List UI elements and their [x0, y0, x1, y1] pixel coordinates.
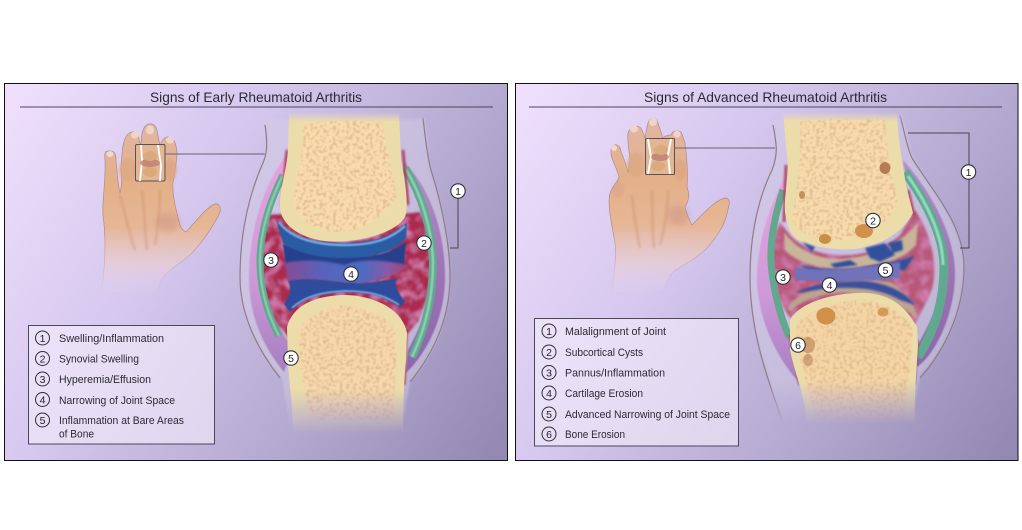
leader line from hand to joint — [674, 147, 775, 149]
cartilage blue upper — [276, 218, 407, 269]
cartilage blue lower — [284, 278, 405, 312]
red joint space — [261, 212, 431, 345]
marker 2: 2 — [421, 238, 427, 250]
marker 5: 5 — [883, 265, 889, 277]
legend: early: Swelling/Inflammation — [59, 333, 164, 345]
title: early: Signs of Early Rheumatoid Arthritis — [150, 89, 362, 105]
cartilage middle lens — [284, 261, 412, 283]
marker 2 — [417, 236, 431, 250]
legend: early — [28, 326, 214, 444]
joint illustration: advanced — [750, 112, 964, 424]
label bracket 1 — [908, 133, 969, 248]
legend: early: 3 — [40, 374, 46, 386]
synovial membrane green — [771, 172, 944, 357]
legend: advanced: 6 — [546, 429, 552, 441]
legend: early: Narrowing of Joint Space — [59, 395, 175, 407]
marker 5: 5 — [288, 353, 294, 365]
marker 3 — [776, 270, 790, 284]
eroded cartilage lower — [788, 281, 918, 320]
upper bone eroded — [783, 112, 913, 249]
marker 1: 1 — [455, 186, 461, 198]
synovium purple — [249, 155, 445, 373]
legend: early: 4 — [40, 394, 46, 406]
eroded cartilage upper — [784, 222, 918, 276]
marker 3: 3 — [780, 272, 786, 284]
legend: advanced: 2 — [546, 347, 552, 359]
marker 6 — [791, 338, 805, 352]
legend: advanced: Cartilage Erosion — [565, 388, 643, 400]
legend: early: 1 — [40, 333, 46, 345]
legend: early: Synovial Swelling — [59, 354, 139, 366]
label bracket 1 — [450, 198, 458, 248]
pink joint space — [772, 210, 934, 330]
legend: advanced: Subcortical Cysts — [565, 347, 643, 359]
marker 1 — [961, 165, 976, 179]
legend: early: of Bone — [59, 428, 94, 440]
legend: early: Inflammation at Bare Areas — [59, 415, 184, 427]
inset box on finger joint — [646, 138, 674, 174]
synovium purple — [757, 160, 955, 382]
illustration: hand with early swelling — [102, 124, 220, 296]
marker 4: 4 — [348, 269, 354, 281]
panel: advanced rheumatoid arthritis — [516, 84, 1018, 460]
legend: advanced: 1 — [546, 326, 552, 338]
inset box on finger joint — [136, 144, 165, 181]
legend: advanced: Bone Erosion — [565, 429, 625, 441]
marker 2: 2 — [870, 216, 876, 228]
marker 1: 1 — [966, 167, 972, 179]
legend: early: 2 — [40, 354, 46, 366]
legend: advanced: 5 — [546, 409, 552, 421]
synovial membrane green — [260, 168, 433, 357]
leader line from hand to joint — [165, 153, 265, 155]
panel: early rheumatoid arthritis — [4, 84, 508, 460]
marker 5 — [284, 351, 298, 365]
illustration: hand with advanced deformity — [609, 118, 729, 296]
marker 4: 4 — [827, 280, 833, 292]
marker 2 — [866, 213, 880, 228]
joint illustration: early — [240, 112, 450, 434]
subcortical cysts: upper — [799, 162, 890, 244]
marker 4 — [344, 267, 358, 281]
lower bone eroded — [790, 293, 918, 424]
upper bone — [280, 112, 407, 242]
marker 5 — [878, 263, 893, 277]
legend: early: Hyperemia/Effusion — [59, 374, 151, 386]
marker 3 — [264, 253, 278, 267]
legend: advanced: Malalignment of Joint — [565, 326, 666, 338]
legend: advanced: 4 — [546, 388, 552, 400]
legend: advanced — [534, 318, 738, 446]
legend: advanced: Pannus/Inflammation — [565, 368, 665, 380]
narrowed joint space — [795, 262, 900, 281]
red edges of bone — [784, 165, 917, 385]
title: advanced: Signs of Advanced Rheumatoid Arthritis — [644, 89, 887, 105]
marker 6: 6 — [795, 340, 801, 352]
legend: advanced: 3 — [546, 368, 552, 380]
lower bone — [287, 295, 407, 434]
red edges of bone — [282, 150, 408, 385]
legend: advanced: Advanced Narrowing of Joint Space — [565, 409, 730, 421]
bone erosions: lower — [801, 308, 888, 366]
legend: early: 5 — [40, 415, 46, 427]
marker 1 — [451, 184, 465, 198]
marker 4 — [822, 278, 837, 292]
marker 3: 3 — [268, 255, 274, 267]
